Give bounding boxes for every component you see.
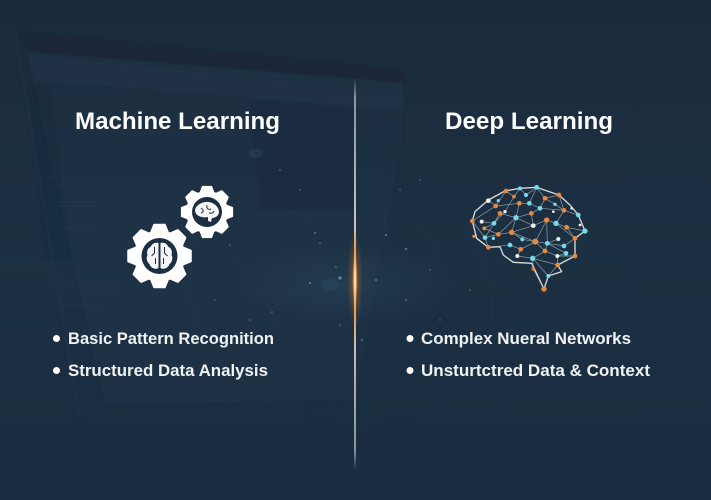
white nodes — [480, 198, 581, 258]
bullet — [53, 335, 60, 342]
icon: neural network brain — [470, 185, 588, 292]
bullet — [406, 335, 414, 342]
text: Structured Data Analysis — [68, 362, 268, 380]
icon: large gear — [128, 224, 191, 288]
list: deep learning — [406, 330, 651, 380]
bullet — [53, 367, 60, 374]
orange nodes — [470, 189, 577, 292]
network links — [472, 187, 585, 289]
brain outline — [472, 187, 585, 289]
cyan nodes — [483, 185, 588, 278]
bullet — [406, 367, 414, 374]
text: Basic Pattern Recognition — [68, 330, 274, 348]
icon: small gear — [182, 186, 232, 238]
heading: Machine Learning: Machine Learning — [75, 108, 280, 135]
text: Unsturtctred Data & Context — [421, 362, 651, 380]
list: machine learning — [53, 330, 274, 380]
icon: gears with brains — [128, 186, 232, 288]
divider with glow — [347, 78, 363, 470]
heading: Deep Learning: Deep Learning — [445, 108, 613, 135]
text: Complex Nueral Networks — [421, 330, 631, 348]
